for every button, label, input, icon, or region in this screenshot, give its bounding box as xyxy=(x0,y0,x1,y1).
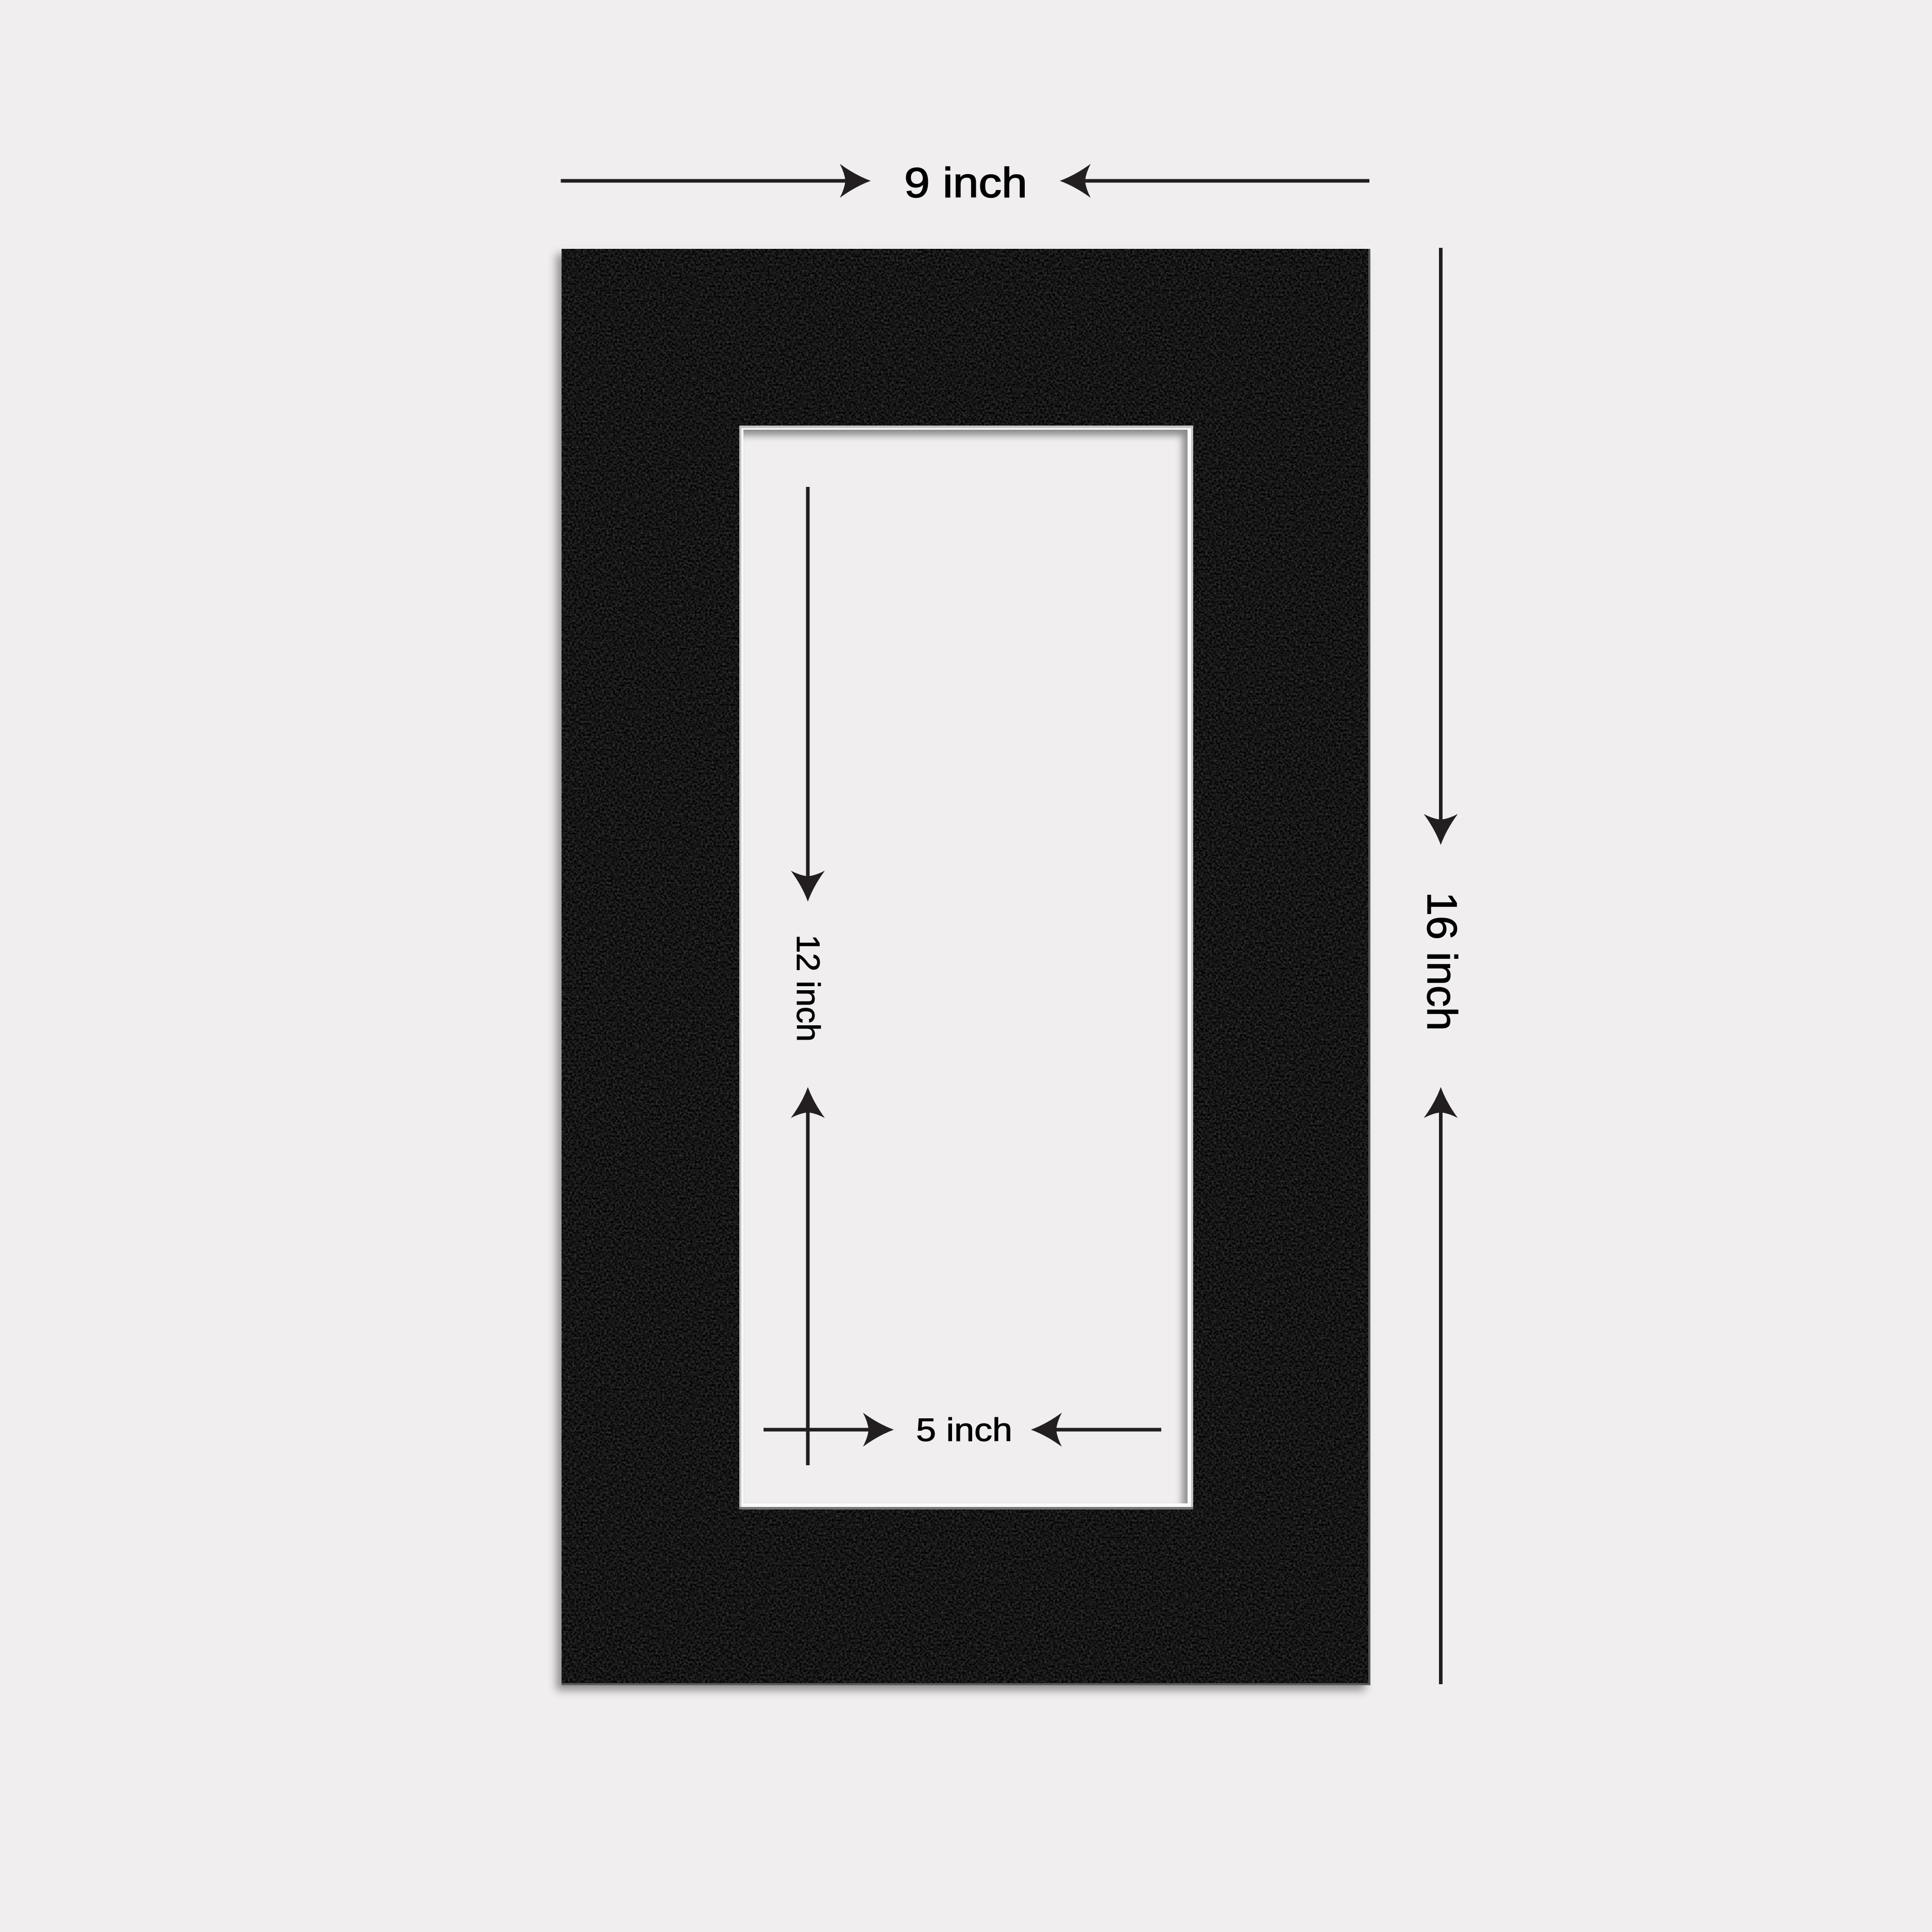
arrow: top width, left xyxy=(561,164,871,198)
board edge highlight xyxy=(562,249,1370,1685)
label: 5 inch: 5 inch xyxy=(916,1412,1012,1448)
window opening with inner shadow xyxy=(743,430,1188,1503)
window bottom bevel edge xyxy=(739,1507,1193,1510)
arrow: top width, right xyxy=(1060,164,1369,198)
window cut-out xyxy=(739,426,1193,1510)
arrow: inner height, bottom xyxy=(791,1087,825,1465)
bevel white frame xyxy=(741,428,1191,1507)
label: 16 inch: 16 inch xyxy=(1418,892,1465,1031)
mat board xyxy=(562,249,1370,1685)
label: 12 inch: 12 inch xyxy=(790,935,826,1042)
arrow: inner width, right xyxy=(1031,1413,1161,1447)
arrow: inner height, top xyxy=(791,487,825,902)
arrow: right height, top xyxy=(1424,248,1458,845)
arrow: inner width, left xyxy=(764,1413,894,1447)
label: 9 inch: 9 inch xyxy=(904,160,1027,206)
board grain texture xyxy=(562,249,1368,1683)
arrow: right height, bottom xyxy=(1424,1087,1458,1684)
